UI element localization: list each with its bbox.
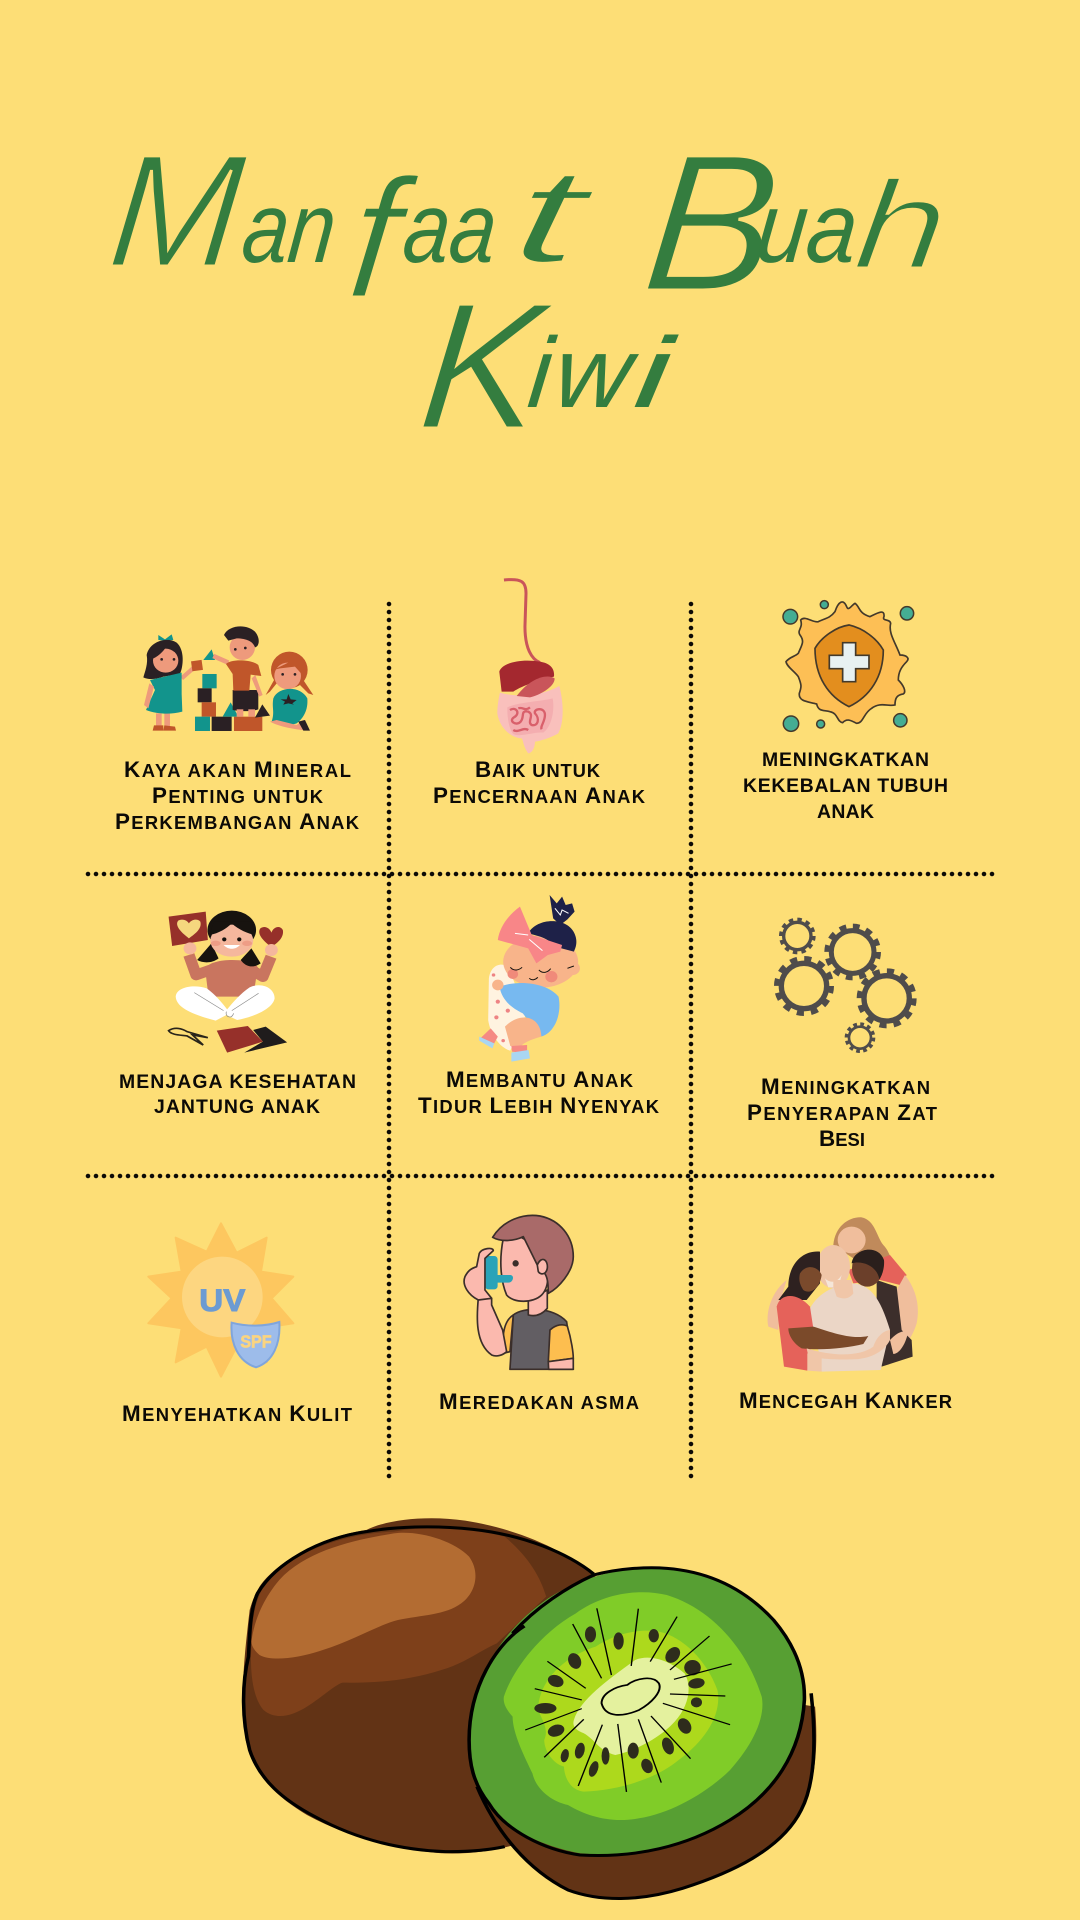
text block: BAIK UNTUK	[475, 757, 601, 782]
icon: sun with UV and SPF shield: UV	[199, 1283, 245, 1318]
text block	[747, 1074, 938, 1151]
grid lines: vertical and horizontal dotted dividers	[88, 604, 993, 1478]
text block: JANTUNG ANAK	[154, 1096, 320, 1118]
title: M	[102, 121, 253, 300]
text block: TIDUR LEBIH NYENYAK	[418, 1093, 660, 1118]
title: i	[630, 317, 681, 429]
text block: MENCEGAH KANKER	[739, 1388, 952, 1413]
icon: boy using inhaler	[464, 1215, 573, 1369]
icon: sun with UV and SPF shield: SPF	[240, 1332, 272, 1352]
title: w	[550, 317, 643, 428]
title: aa	[399, 172, 502, 284]
icon: sleeping baby	[479, 895, 580, 1062]
icon: children playing with blocks	[143, 626, 313, 731]
text block: MENINGKATKAN	[761, 1074, 930, 1099]
icon: girl with paper hearts	[169, 911, 287, 1053]
title: ua	[752, 172, 863, 284]
panel: Kaya akan Mineral	[115, 626, 360, 834]
title: f	[341, 144, 424, 334]
text block: MEMBANTU ANAK	[446, 1067, 634, 1092]
icon: sun with UV and SPF shield	[148, 1223, 293, 1377]
cut kiwi half	[469, 1568, 816, 1899]
title	[102, 114, 954, 467]
text block: KAYA AKAN MINERAL	[124, 757, 351, 782]
title: h	[849, 154, 954, 295]
panel: Meredakan asma	[439, 1215, 639, 1414]
text block	[743, 749, 948, 823]
text block	[115, 757, 360, 834]
panel: Membantu Anak Tidur Lebih Nyenyak	[418, 895, 660, 1118]
text block	[433, 757, 646, 808]
text block: MEREDAKAN ASMA	[439, 1389, 639, 1414]
text block: MENYEHATKAN KULIT	[122, 1401, 353, 1426]
text block: PERKEMBANGAN ANAK	[115, 809, 360, 834]
text block: MENINGKATKAN	[762, 749, 929, 771]
text block: PENTING UNTUK	[152, 783, 324, 808]
text block	[119, 1071, 356, 1118]
panel: Meningkatkan Penyerapan Zat Besi	[747, 920, 938, 1151]
icon: family hug	[768, 1217, 918, 1372]
panel: menjaga kesehatan jantung anak	[119, 911, 356, 1118]
text block: BESI	[819, 1126, 865, 1151]
illustration: kiwi fruit	[243, 1518, 816, 1899]
title: t	[505, 140, 602, 291]
icon: shield with medical cross	[783, 601, 914, 731]
icon: digestive system	[497, 580, 563, 753]
text block: PENCERNAAN ANAK	[433, 783, 646, 808]
text block	[418, 1067, 660, 1118]
whole kiwi	[243, 1518, 596, 1854]
panel: Menyehatkan Kulit	[122, 1223, 353, 1426]
text block: ANAK	[817, 801, 874, 823]
icon: gears	[777, 920, 913, 1051]
title: an	[238, 172, 341, 284]
panel: Baik untuk Pencernaan Anak	[433, 580, 646, 808]
text block: KEKEBALAN TUBUH	[743, 775, 948, 797]
panel: Mencegah Kanker	[739, 1217, 952, 1413]
title: i	[524, 317, 560, 429]
text block: PENYERAPAN ZAT	[747, 1100, 938, 1125]
title: K	[412, 266, 560, 467]
title: B	[636, 114, 789, 332]
text block: MENJAGA KESEHATAN	[119, 1071, 356, 1093]
panel: meningkatkan kekebalan tubuh anak	[743, 601, 948, 823]
